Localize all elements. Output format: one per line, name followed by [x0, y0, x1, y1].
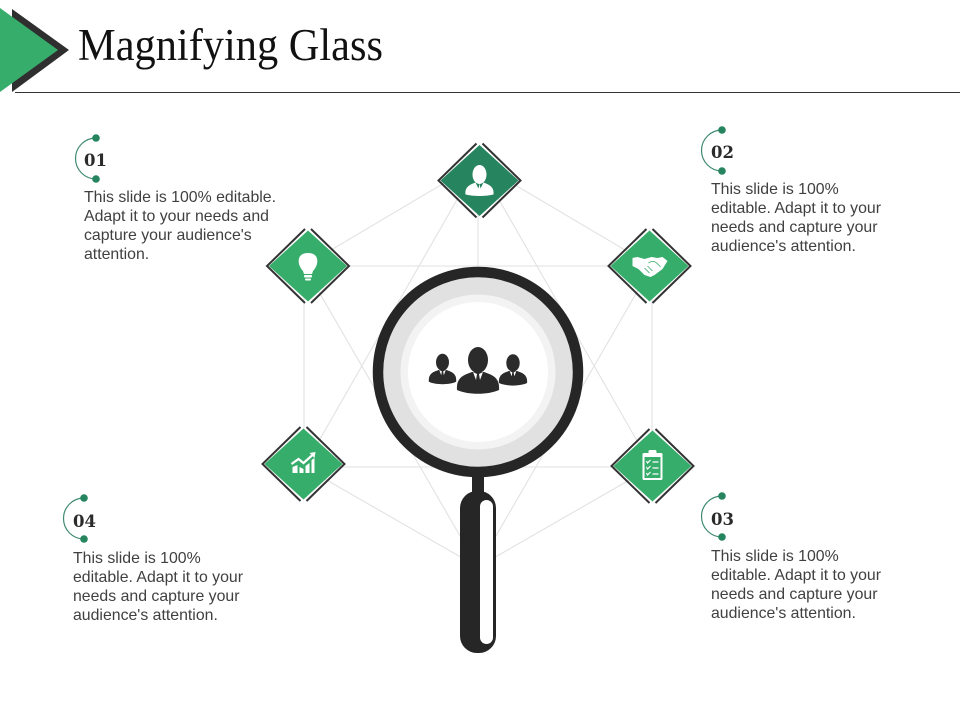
icon: lightbulb — [299, 253, 317, 280]
icon: handshake — [632, 257, 668, 277]
number: 02 — [711, 143, 734, 162]
text block: This slide is 100% — [711, 548, 839, 565]
text block: This slide is 100% — [711, 181, 839, 198]
text block: needs and capture your — [73, 588, 240, 605]
number arc — [64, 494, 88, 543]
text block: This slide is 100% editable. — [84, 189, 276, 206]
icon: growth chart — [292, 452, 316, 473]
lens light band — [400, 294, 556, 450]
header: arrow and rule — [0, 8, 960, 93]
text block: editable. Adapt it to your — [711, 567, 882, 584]
icon: team of three people — [429, 347, 527, 394]
diamond: handshake — [608, 229, 690, 303]
header rule — [15, 92, 960, 93]
text block: audience's attention. — [711, 605, 856, 622]
green arrow — [0, 8, 58, 92]
diamond: clipboard — [612, 429, 694, 503]
handle — [460, 491, 496, 653]
magnifying glass — [378, 272, 578, 653]
right person — [499, 354, 527, 386]
icon: clipboard — [642, 450, 662, 480]
diamond: growth chart — [262, 427, 344, 501]
centre person — [457, 347, 499, 394]
handle neck — [472, 472, 484, 496]
text block: capture your audience's — [84, 227, 252, 244]
lens centre — [408, 302, 548, 442]
callout 02 — [702, 126, 882, 255]
text block: This slide is 100% — [73, 550, 201, 567]
number arc — [76, 134, 100, 183]
handle highlight — [480, 500, 493, 644]
number: 03 — [711, 510, 734, 529]
text block: Adapt it to your needs and — [84, 208, 269, 225]
diamond: top person — [438, 144, 520, 218]
callout 03 — [702, 492, 882, 622]
network lines — [304, 163, 652, 567]
text block: audience's attention. — [73, 607, 218, 624]
number arc — [702, 492, 726, 541]
text block: audience's attention. — [711, 238, 856, 255]
icon: person — [465, 165, 494, 196]
left person — [429, 354, 456, 384]
dark arrow — [12, 9, 69, 92]
callout 04 — [64, 494, 244, 624]
lens ring — [378, 272, 578, 472]
text block: attention. — [84, 246, 149, 263]
diamond: lightbulb — [267, 229, 349, 303]
text block: editable. Adapt it to your — [73, 569, 244, 586]
number arc — [702, 126, 726, 175]
lens grey band — [382, 276, 574, 468]
callout 01 — [76, 134, 276, 263]
text block: editable. Adapt it to your — [711, 200, 882, 217]
number: 04 — [73, 512, 96, 531]
text block: needs and capture your — [711, 219, 878, 236]
title: Magnifying Glass — [78, 20, 383, 70]
number: 01 — [84, 151, 107, 170]
text block: needs and capture your — [711, 586, 878, 603]
